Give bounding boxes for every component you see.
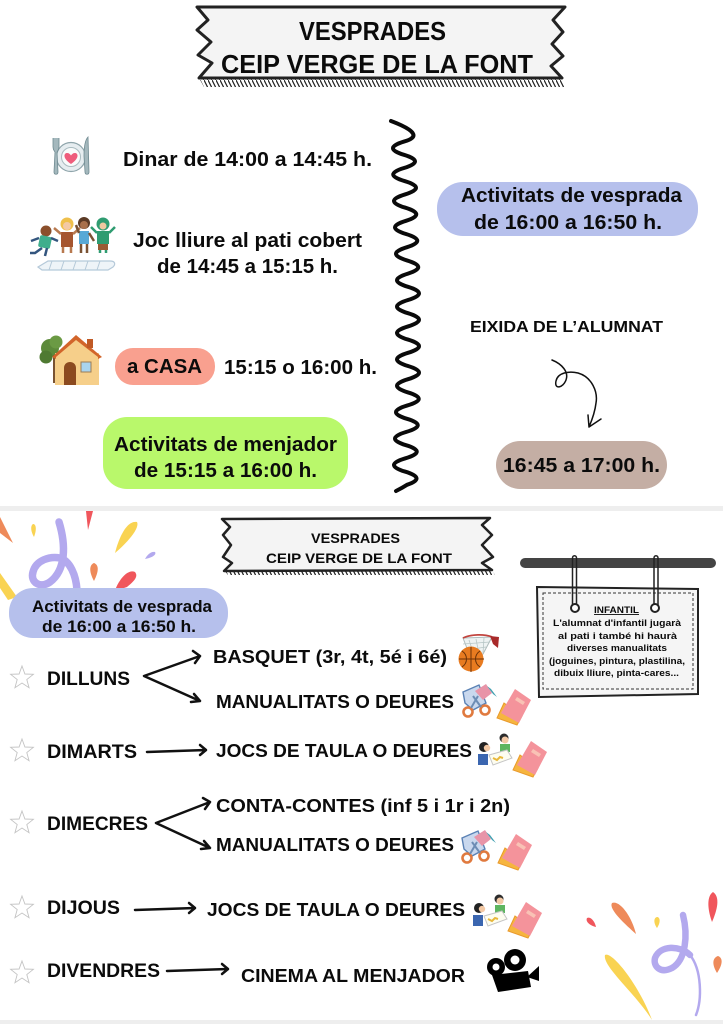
- pill: afternoon activities: Activitats de vesprada: [461, 185, 683, 207]
- row: Thursday: [11, 896, 465, 920]
- title banner: VESPRADES: [299, 16, 446, 46]
- icon: children at table: [478, 734, 512, 765]
- row: Wednesday: [11, 796, 510, 855]
- text: lunch time: Dinar de 14:00 a 14:45 h.: [123, 149, 372, 171]
- icon: basketball and hoop: [458, 635, 499, 672]
- title banner: [197, 7, 565, 87]
- confetti: bottom right: [587, 892, 722, 1020]
- pill: dining hall activities: [103, 417, 348, 489]
- text: free play: Joc lliure al pati cobert: [133, 230, 362, 252]
- bottom band: [0, 1020, 723, 1024]
- row: Friday: CINEMA AL MENJADOR: [241, 966, 465, 986]
- hanging sign: infantil: [520, 556, 716, 697]
- row: Tuesday: JOCS DE TAULA O DEURES: [216, 741, 472, 761]
- row: Thursday: JOCS DE TAULA O DEURES: [207, 900, 465, 920]
- pill: afternoon activities (lower): [9, 588, 228, 638]
- row: Tuesday: DIMARTS: [47, 741, 137, 763]
- icon: children playing hopscotch: [30, 217, 115, 270]
- hanging sign: infantil: (joguines, pintura, plastilina,: [549, 656, 685, 666]
- pill: afternoon activities (lower): de 16:00 a 16:50 h.: [42, 618, 196, 636]
- row: Thursday: DIJOUS: [47, 897, 120, 919]
- hanging sign: infantil: al pati i també hi haurà: [558, 631, 678, 641]
- icon: film camera: [487, 949, 539, 992]
- text: home time: 15:15 o 16:00 h.: [224, 357, 377, 379]
- title banner: CEIP VERGE DE LA FONT: [221, 49, 533, 79]
- lower title banner: [222, 518, 495, 575]
- icon: notebooks: [497, 689, 531, 725]
- icon: plate with cutlery: [53, 137, 89, 174]
- icon: notebooks: [513, 741, 547, 777]
- pill: afternoon activities: de 16:00 a 16:50 h.: [474, 212, 662, 234]
- row: Wednesday: DIMECRES: [47, 813, 148, 835]
- row: Friday: [11, 960, 465, 986]
- wavy vertical divider: [391, 121, 419, 491]
- arrow: curly: [552, 360, 601, 427]
- icon: notebooks: [498, 834, 532, 870]
- pill: a CASA: [115, 348, 215, 385]
- hanging sign: infantil: INFANTIL: [594, 605, 640, 615]
- pill: a CASA: a CASA: [127, 356, 202, 378]
- pill: dining hall activities: Activitats de menjador: [114, 434, 337, 456]
- pill: dining hall activities: de 15:15 a 16:00 h.: [134, 460, 317, 482]
- row: Monday: DILLUNS: [47, 668, 130, 690]
- icon: house with tree: [40, 335, 102, 385]
- pill: exit time: 16:45 a 17:00 h.: [503, 455, 660, 477]
- row: Monday: MANUALITATS O DEURES: [216, 692, 454, 712]
- text: free play: [133, 230, 362, 278]
- hanging sign: infantil: L'alumnat d'infantil jugarà: [553, 618, 682, 628]
- row: Wednesday: MANUALITATS O DEURES: [216, 835, 454, 855]
- text: free play: de 14:45 a 15:15 h.: [157, 256, 338, 278]
- icon: children at table: [473, 894, 507, 926]
- icon: notebooks: [508, 902, 542, 938]
- pill: afternoon activities (lower): Activitats de vesprada: [32, 598, 213, 616]
- lower title banner: VESPRADES: [311, 530, 400, 546]
- section divider band: [0, 506, 723, 511]
- row: Wednesday: CONTA-CONTES (inf 5 i 1r i 2n): [216, 796, 510, 816]
- row: Monday: [11, 647, 454, 712]
- hanging sign: infantil: dibuix lliure, pinta-cares...: [554, 668, 679, 678]
- row: Friday: DIVENDRES: [47, 960, 160, 982]
- hanging sign: infantil: diverses manualitats: [567, 643, 667, 653]
- icon: crafts: [463, 684, 497, 716]
- icon: crafts: [462, 830, 496, 862]
- text: pupils' exit: EIXIDA DE L’ALUMNAT: [470, 319, 663, 336]
- pill: exit time: [496, 441, 667, 489]
- row: Tuesday: [11, 739, 472, 763]
- confetti: top left: [0, 511, 155, 600]
- pill: afternoon activities: [437, 182, 698, 236]
- lower title banner: CEIP VERGE DE LA FONT: [266, 550, 452, 566]
- row: Monday: BASQUET (3r, 4t, 5é i 6é): [213, 647, 447, 667]
